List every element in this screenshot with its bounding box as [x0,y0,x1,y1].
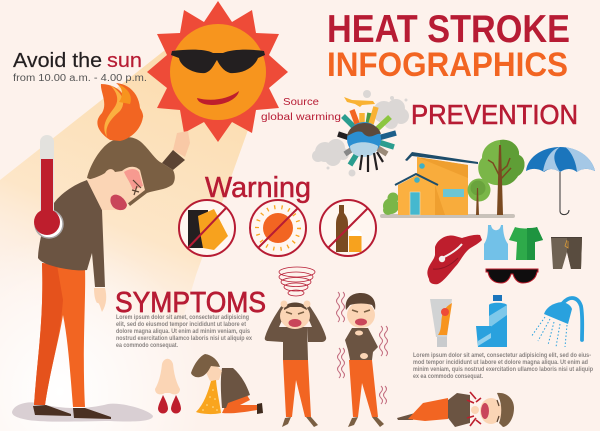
clothing: shorts [551,237,582,269]
hands on throat [467,392,481,426]
shoe [397,413,415,420]
heading: warning: Warning [205,172,311,204]
character lying down [397,392,514,427]
sunglasses [171,50,265,73]
raised hand [173,131,190,157]
hair and hands [284,302,307,310]
small bush [383,192,399,215]
shirt [221,368,250,408]
vomit [196,380,221,414]
hair [191,354,220,377]
clothing: t-shirt [509,227,543,260]
shower head [531,298,582,347]
shoes [33,405,71,416]
flame on head [97,83,143,141]
heading: prevention: PREVENTION [411,99,578,130]
roofs [405,152,478,164]
eyes [286,312,304,314]
pants [222,395,257,413]
shoe [257,403,263,414]
spiral [279,267,315,296]
heading: avoid the sun: from 10.00 a.m. - 4.00 p.m. [13,73,147,84]
hanging hand [94,288,106,312]
text block: symptoms: elit, sed do eiusmod tempor incididunt ut labore et [116,322,246,328]
sleeve [162,150,185,170]
clothing: hat [427,235,482,284]
icon: polluted earth [312,90,409,176]
wavy lines [336,292,388,404]
mouth [355,318,367,326]
airplane [344,97,375,107]
label: source global warming: global warming [261,111,341,123]
cheek blush [124,169,143,190]
pants [34,263,85,407]
sunscreen tube [430,299,452,347]
thermometer icon [34,135,63,238]
sun icon [147,1,288,142]
text block: symptoms: Lorem ipsum dolor sit amet, consectetur adipisicing [116,315,249,321]
clothing: tank top [484,225,508,260]
legs [349,360,378,417]
face [87,167,145,210]
small tree [468,178,490,202]
text block: symptoms: dolore magna aliqua. Ut enim ad minim veniam, quis [116,329,251,335]
water bottle and glass [476,295,507,347]
eyes [497,400,499,422]
light beam from sun [0,50,248,345]
text block: prevention [413,353,593,380]
house upper wall [417,157,468,215]
heading: avoid the sun [13,50,147,84]
shirt [448,393,470,427]
shadow [12,402,153,422]
door [410,192,420,215]
house front [398,175,435,215]
house scene [380,140,525,218]
face [203,365,222,381]
text block: symptoms [116,315,253,349]
big tree [478,140,525,185]
head [280,303,310,329]
window [443,189,464,197]
ban sign: no sun exposure door [179,200,235,256]
mouth [110,195,127,210]
label: source global warming: Source [283,96,319,108]
head [347,302,375,328]
torso and arms [265,305,326,360]
white floor glow [0,170,240,431]
shoes [348,417,358,427]
vomit speckles [202,389,218,411]
character vomiting [191,354,263,414]
shoes [282,417,291,427]
sunglasses [486,269,538,283]
character dizzy [265,267,326,427]
heading: symptoms: SYMPTOMS [115,287,266,319]
text block: symptoms: ea commodo consequat. [116,343,178,349]
title: HEAT STROKE [327,8,570,51]
torso [345,328,378,360]
face [480,398,502,424]
round windows [414,177,420,183]
shirt [38,180,105,287]
title [327,8,570,84]
hair [497,393,514,427]
icon: umbrella [526,147,595,215]
text block: symptoms: nostrud exercitation ullamco laboris nisi ut aliquip ex [116,336,253,342]
icon: nosebleed [155,359,181,414]
heading: avoid the sun: Avoid the [13,50,102,72]
mouth [288,319,302,327]
hair [87,137,175,206]
eyes [352,310,370,312]
pants [408,398,448,421]
heading: avoid the sun: sun [107,50,142,72]
character with chest pain [336,292,388,427]
closed eye [132,180,141,195]
hair [346,293,375,310]
ban sign: no sun [250,200,306,256]
legs [283,360,311,417]
ban sign: no alcohol [320,200,376,256]
mouth [481,403,489,419]
smile [197,91,239,105]
hands [355,330,363,336]
text block: prevention: ex ea commodo consequat. [413,374,483,380]
title: INFOGRAPHICS [327,46,568,84]
label: source global warming [261,96,341,123]
neck [471,406,479,414]
main character [12,83,190,422]
